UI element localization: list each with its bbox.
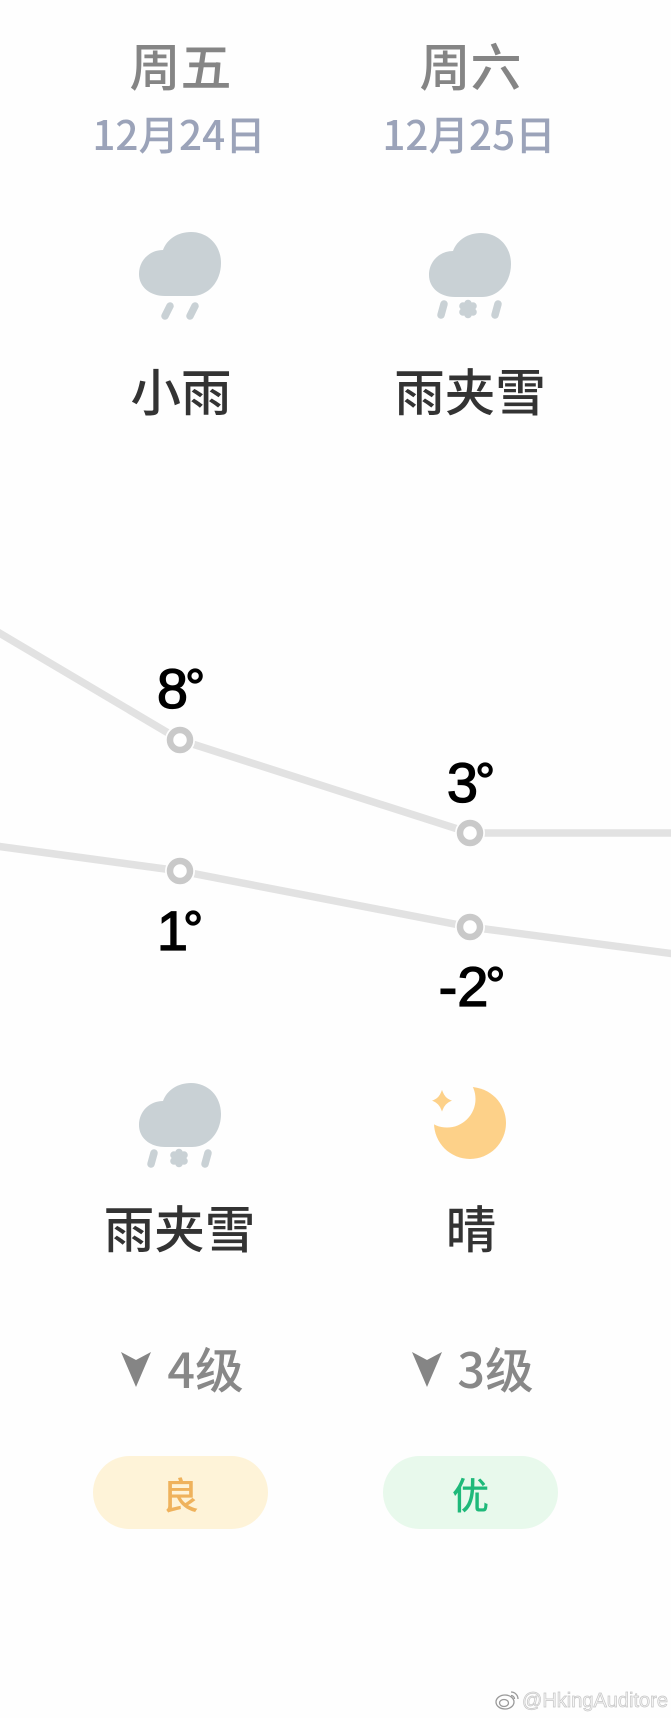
- icon: crescent moon with star: [418, 1070, 506, 1159]
- value: 3°: 3: [447, 751, 478, 814]
- badge: air quality excellent: [383, 1456, 558, 1529]
- value: 1°: °: [183, 901, 203, 957]
- date: 12月25日: 12月25日: [382, 103, 556, 162]
- badge: air quality good: 良: [162, 1466, 199, 1520]
- column: Friday header: [92, 27, 266, 162]
- wind: level 3: [412, 1332, 534, 1402]
- date: 12月24日: 12月24日: [92, 103, 266, 162]
- wind: level 4: [121, 1332, 244, 1402]
- value: 8°: °: [185, 659, 205, 715]
- icon: sleet cloud night: [139, 1083, 221, 1167]
- icon: weibo logo: [496, 1692, 518, 1709]
- column: Saturday header: [382, 27, 556, 162]
- heading: 周五: 周五: [129, 27, 232, 101]
- value: -2°: °: [485, 957, 505, 1013]
- watermark: weibo handle: [496, 1690, 668, 1712]
- point: low Saturday: [460, 917, 480, 937]
- point: high Saturday: [460, 823, 480, 843]
- value: 1°: 1: [157, 899, 188, 962]
- icon: sleet cloud day: [429, 233, 511, 318]
- heading: 周六: 周六: [419, 27, 522, 101]
- high temperature line: [0, 631, 671, 833]
- low temperature line: [0, 846, 671, 954]
- badge: air quality good: [93, 1456, 268, 1529]
- icon: light rain cloud: [139, 232, 221, 316]
- icon: wind arrow: [121, 1352, 151, 1387]
- text: @HkingAuditore: @HkingAuditore: [522, 1690, 668, 1712]
- badge: air quality excellent: 优: [452, 1466, 489, 1520]
- label: 晴: 晴: [446, 1189, 496, 1263]
- point: low Friday: [170, 861, 190, 881]
- text: 3级: 3级: [457, 1332, 534, 1402]
- value: 3°: °: [475, 753, 495, 809]
- point: high Friday: [170, 730, 190, 750]
- text: 4级: 4级: [167, 1332, 244, 1402]
- label: 雨夹雪 night: 雨夹雪: [104, 1189, 255, 1263]
- value: 8°: 8: [157, 657, 188, 720]
- label: 小雨: 小雨: [130, 352, 232, 426]
- value: -2°: -2: [439, 955, 488, 1018]
- label: 雨夹雪: 雨夹雪: [394, 352, 546, 426]
- chart: temperature lines: [0, 631, 671, 1018]
- icon: wind arrow: [412, 1352, 442, 1387]
